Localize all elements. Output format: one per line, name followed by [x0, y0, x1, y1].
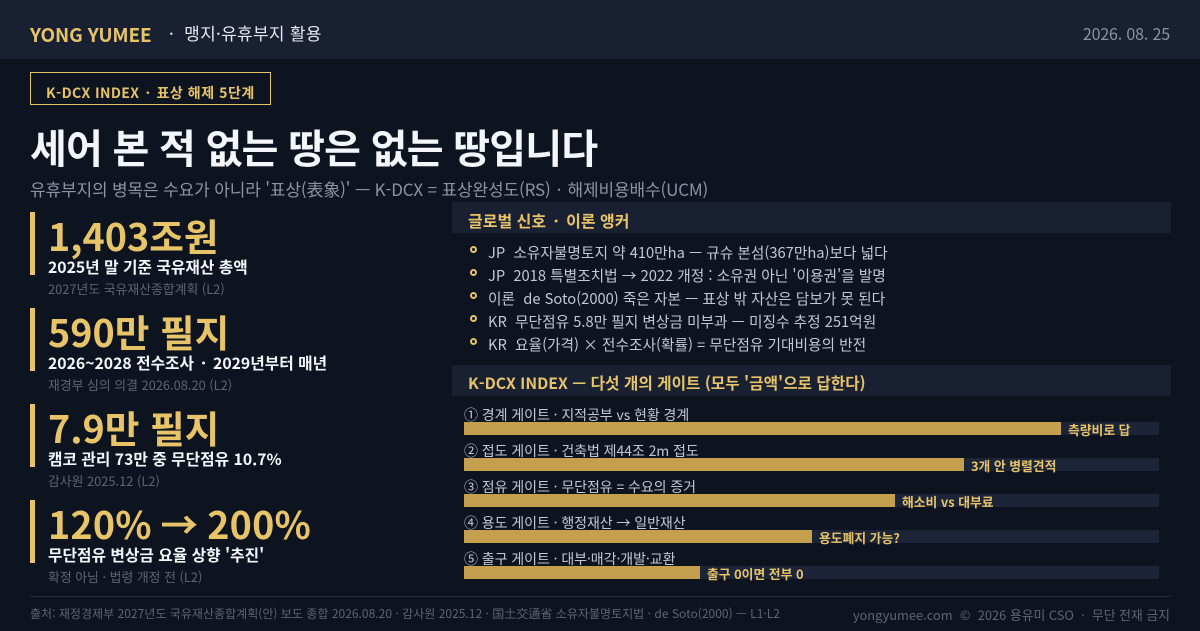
- panel: stat 4: [30, 495, 311, 586]
- subtitle: ·: [557, 176, 561, 201]
- bar chart: gates: [464, 405, 1159, 583]
- panel: stat 1: [30, 207, 248, 298]
- subtitle: 유휴부지의 병목은 수요가 아니라 '표상(表象)' — K-DCX = 표상완성도(RS) 해제비용배수(UCM): [30, 176, 708, 201]
- copyright: yongyumee.com © 2026 용유미 CSO · 무단 전재 금지: [853, 605, 1170, 624]
- bullet 5: KR 요율(가격) × 전수조사(확률) = 무단점유 기대비용의 반전: [488, 334, 866, 355]
- gate 5: 출구 0이면 전부 0: [707, 564, 804, 583]
- gate 2: [464, 441, 1159, 475]
- bullet 4: KR 무단점유 5.8만 필지 변상금 미부과 — 미징수 추정 251억원: [488, 311, 876, 332]
- footer: [30, 596, 1171, 631]
- bullet 2: JP 2018 특별조치법 → 2022 개정 : 소유권 아닌 '이용권'을 발명: [488, 265, 886, 286]
- panel: stat 3: 7.9만 필지: [48, 399, 219, 454]
- panel: stat 3: 감사원 2025.12 (L2): [48, 471, 160, 490]
- gate 4: 용도폐지 가능?: [819, 528, 900, 547]
- heading: global signals: ·: [553, 208, 559, 232]
- gate 3: 해소비 vs 대부료: [902, 492, 994, 511]
- gate 1: ① 경계 게이트 · 지적공부 vs 현황 경계: [464, 405, 689, 425]
- bullet 3: 이론 de Soto(2000) 죽은 자본 — 표상 밖 자산은 담보가 못 된다: [488, 288, 885, 309]
- panel: stat 2: ·: [201, 351, 206, 374]
- panel: stat 1: 2027년도 국유재산종합계획 (L2): [48, 279, 225, 298]
- gate 4: ④ 용도 게이트 · 행정재산 → 일반재산: [464, 513, 686, 533]
- date: 2026. 08. 25: [1083, 21, 1170, 45]
- gate 2: ② 접도 게이트 · 건축법 제44조 2m 접도: [464, 441, 699, 461]
- bullet list: [470, 242, 888, 355]
- title: 세어 본 적 없는 땅은 없는 땅입니다: [30, 117, 597, 175]
- panel: stat 4: 확정 아님 · 법령 개정 전 (L2): [48, 567, 202, 586]
- panel: stat 2: 2026~2028 전수조사 2029년부터 매년: [48, 351, 327, 374]
- bullet 1: JP 소유자불명토지 약 410만ha — 규슈 본섬(367만ha)보다 넓다: [488, 242, 888, 263]
- heading: global signals: [452, 202, 1171, 233]
- sources: 출처: 재정경제부 2027년도 국유재산종합계획(안) 보도 종합 2026.08.20 · 감사원 2025.12 · 国土交通省 소유자불명토지법 · de Soto(2000) — L1·L2: [30, 605, 780, 622]
- gate 3: ③ 점유 게이트 · 무단점유 = 수요의 증거: [464, 477, 696, 497]
- panel: stat 2: [30, 303, 327, 394]
- gate 4: [464, 513, 1159, 547]
- panel: stat 3: 캠코 관리 73만 중 무단점유 10.7%: [48, 447, 282, 470]
- panel: stat 4: 120% → 200%: [48, 495, 311, 550]
- tag box: [30, 72, 271, 105]
- heading: gates: K-DCX INDEX — 다섯 개의 게이트 (모두 '금액'으로 답한다): [468, 371, 866, 394]
- header bar: [0, 0, 1200, 59]
- heading: gates: [452, 365, 1171, 396]
- header topic: · 맹지·유휴부지 활용: [169, 20, 322, 45]
- tag box: K-DCX INDEX 표상 해제 5단계: [46, 83, 255, 103]
- gate 3: [464, 477, 1159, 511]
- panel: stat 2: 590만 필지: [48, 303, 229, 358]
- gate 5: ⑤ 출구 게이트 · 대부·매각·개발·교환: [464, 549, 675, 569]
- heading: global signals: 글로벌 신호 이론 앵커: [468, 208, 629, 232]
- panel: stat 3: [30, 399, 282, 490]
- gate 2: 3개 안 병렬견적: [971, 456, 1056, 475]
- panel: stat 4: 무단점유 변상금 요율 상향 '추진': [48, 543, 264, 566]
- gate 5: [464, 549, 1159, 583]
- panel: stat 2: 재경부 심의 의결 2026.08.20 (L2): [48, 375, 232, 394]
- brand name: YONG YUMEE: [30, 21, 152, 48]
- gate 1: [464, 405, 1159, 439]
- panel: stat 1: 1,403조원: [48, 207, 219, 262]
- panel: stat 1: 2025년 말 기준 국유재산 총액: [48, 255, 248, 278]
- gate 1: 측량비로 답: [1068, 420, 1130, 439]
- tag box: ·: [146, 83, 150, 103]
